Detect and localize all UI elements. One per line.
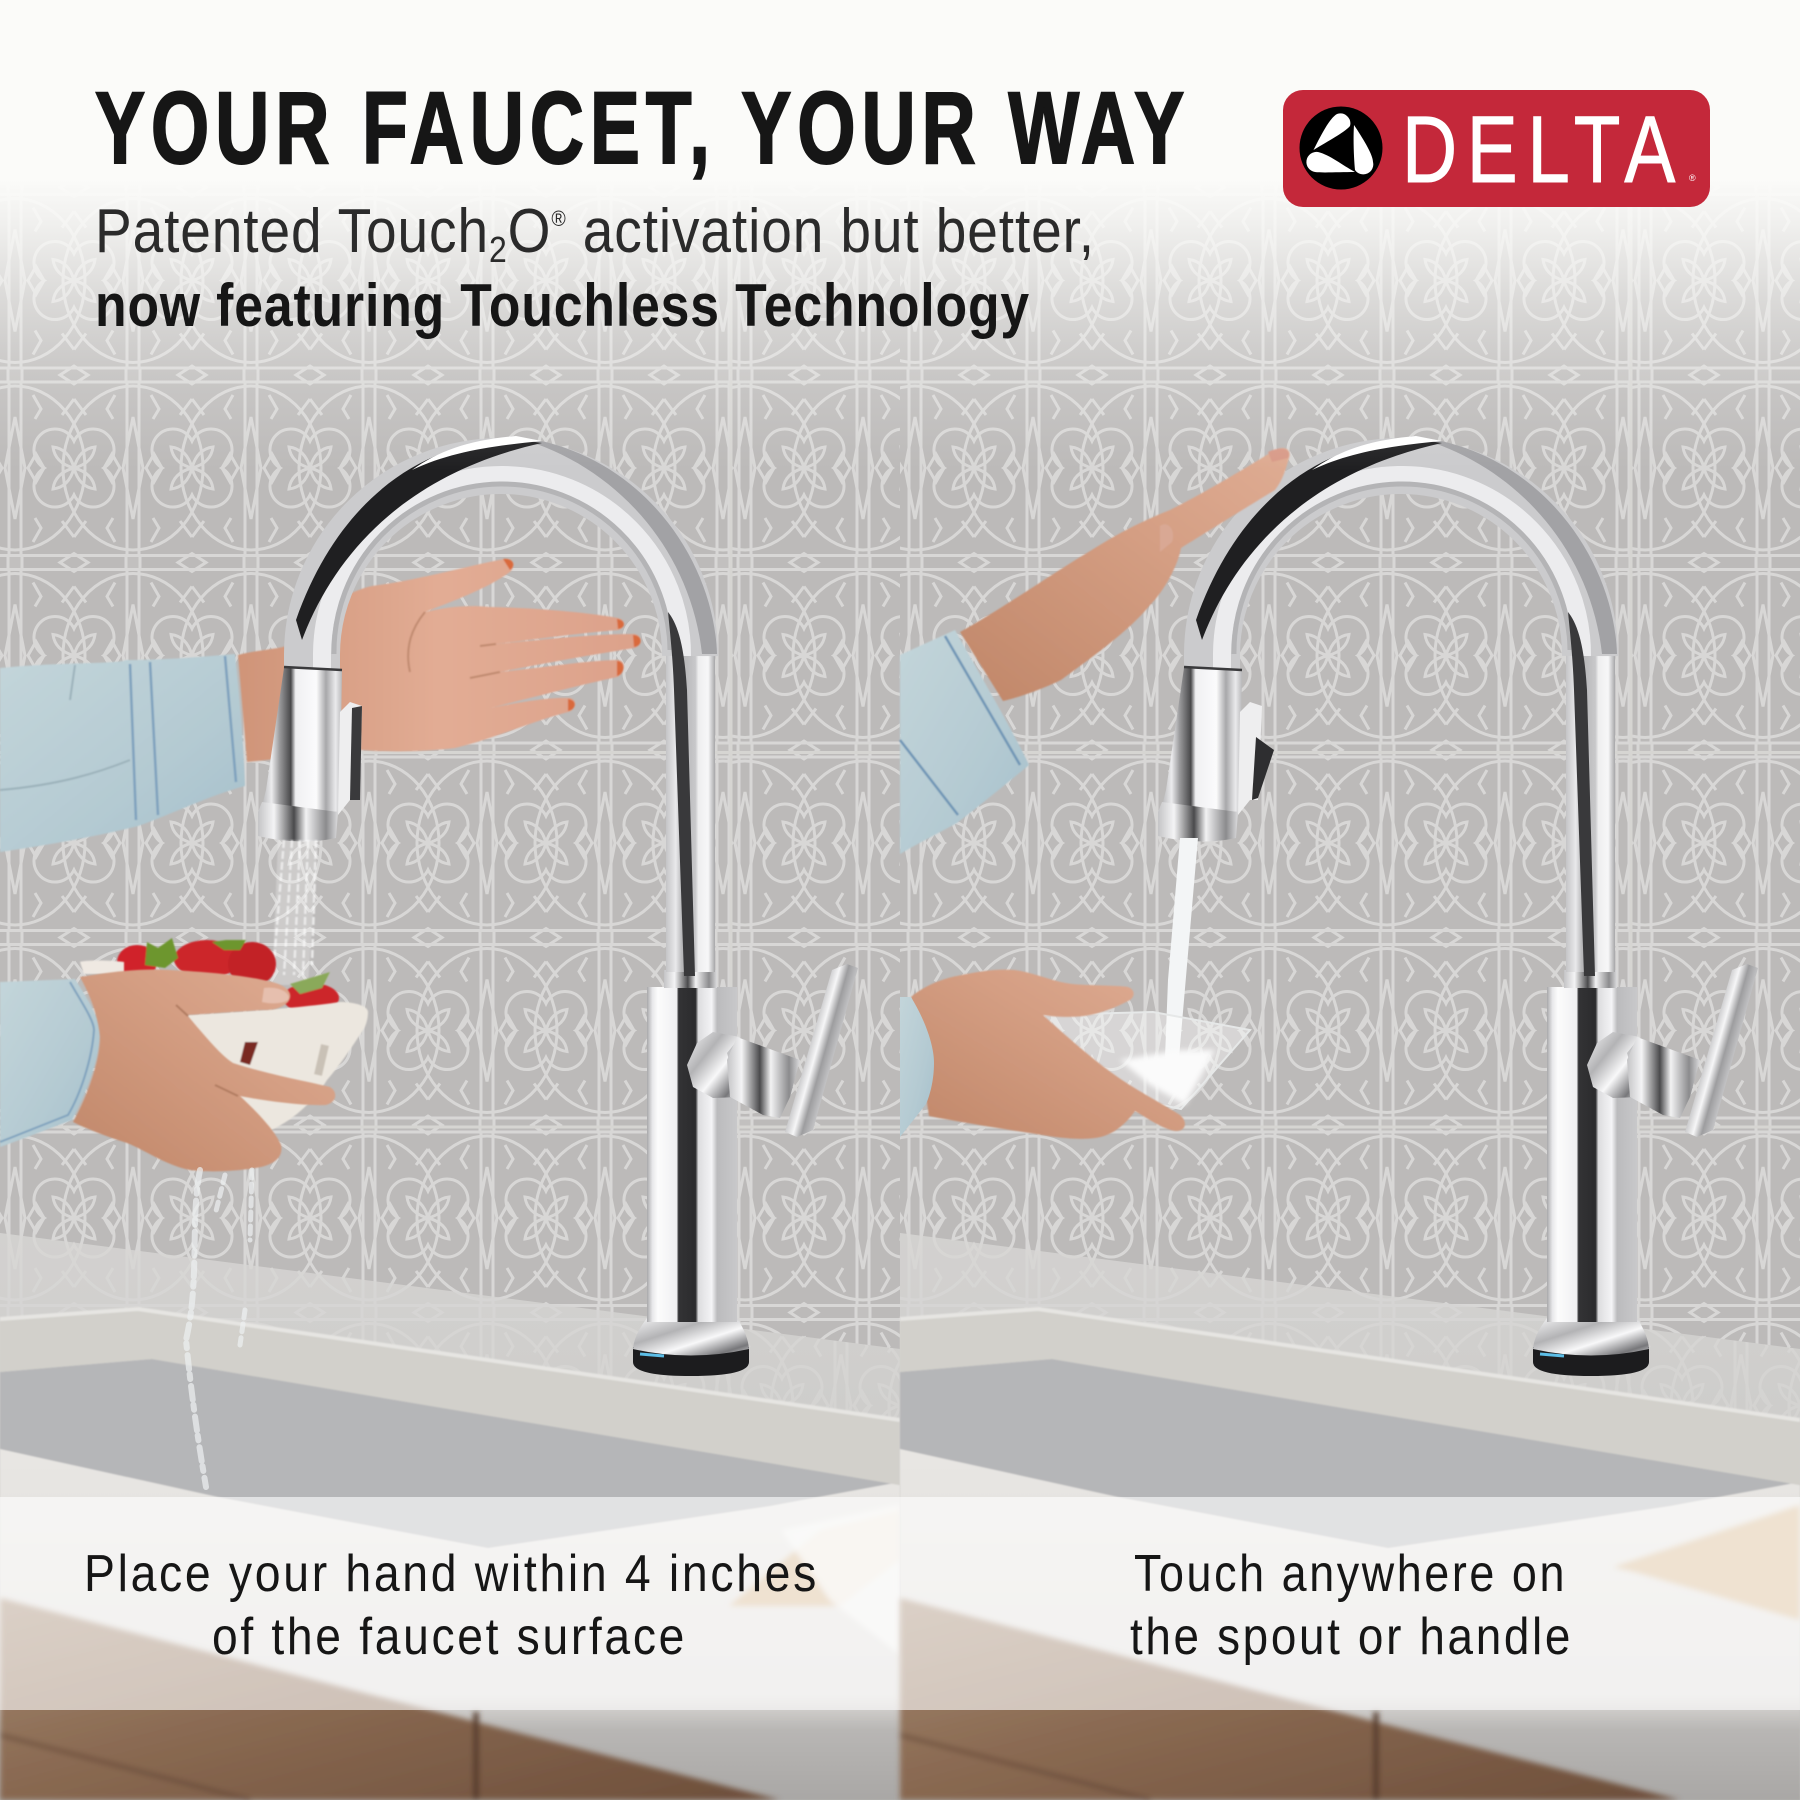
- title: YOUR FAUCET, YOUR WAY: [95, 71, 1190, 185]
- faucet spray button: right: [1238, 702, 1274, 815]
- logo wordmark: DELTA: [1402, 97, 1685, 203]
- photo background: right: [900, 0, 1800, 1800]
- strawberries: [117, 938, 339, 1013]
- logo: Delta: [1283, 90, 1710, 207]
- subtitle line one: activation but better,: [567, 197, 1095, 266]
- hand: holding colander: [73, 969, 335, 1171]
- caption: left: Place your hand within 4 inches: [84, 1545, 819, 1603]
- panel: right photo, touching the spout: [900, 0, 1800, 1800]
- subtitle line one: Patented Touch: [95, 197, 539, 266]
- faucet spray button: left: [338, 702, 362, 815]
- subtitle line one: ®: [551, 206, 567, 231]
- colander: white bowl: [80, 960, 368, 1133]
- sleeve: lower right arm: [900, 997, 934, 1137]
- caption: right: [1130, 1545, 1573, 1666]
- sleeve: upper right arm: [900, 630, 1029, 854]
- subtitle line two: now featuring Touchless Technology: [95, 272, 1030, 339]
- sleeve: lower left arm: [0, 979, 100, 1147]
- caption: right: Touch anywhere on: [1134, 1545, 1567, 1603]
- water: solid stream: [1165, 838, 1198, 1058]
- faucet: left: [258, 436, 858, 1376]
- faucet: right: [1158, 436, 1758, 1376]
- hand: touching spout: [960, 448, 1290, 701]
- wooden cutting board on counter: [1613, 1505, 1800, 1620]
- water: drips below hand: [186, 1170, 252, 1487]
- hand: open palm near spout: [238, 559, 641, 762]
- icon: Delta triangle mark: [1300, 106, 1382, 190]
- subtitle line one: 2: [489, 229, 508, 270]
- panel: left photo, hand near faucet: [0, 0, 900, 1800]
- subtitle line one: O: [508, 197, 551, 266]
- sleeve: upper left arm: [0, 654, 245, 852]
- logo registered mark: ®: [1689, 173, 1696, 183]
- caption: right: the spout or handle: [1130, 1608, 1573, 1666]
- glass bowl with water: [1043, 1012, 1250, 1109]
- hand: holding glass bowl: [911, 970, 1185, 1139]
- caption strip: [0, 1497, 1800, 1710]
- header fade over tiles: [0, 0, 1800, 470]
- glass bowl and cutting board on counter: [729, 1505, 900, 1655]
- caption: left: [84, 1545, 819, 1666]
- caption: left: of the faucet surface: [212, 1608, 687, 1666]
- water: aerated spray: [272, 840, 318, 985]
